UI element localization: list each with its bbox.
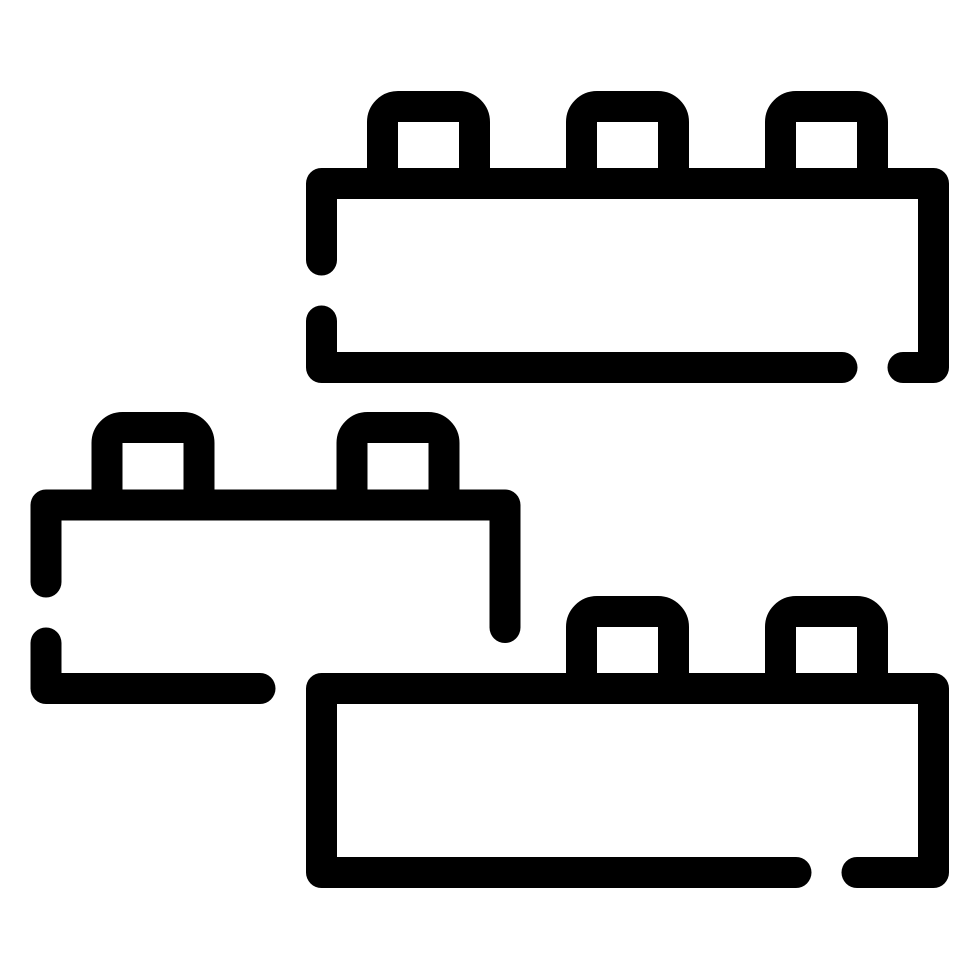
icon: bottom brick <box>322 612 934 872</box>
icon: top brick <box>322 106 934 367</box>
icon: middle brick <box>46 428 505 688</box>
